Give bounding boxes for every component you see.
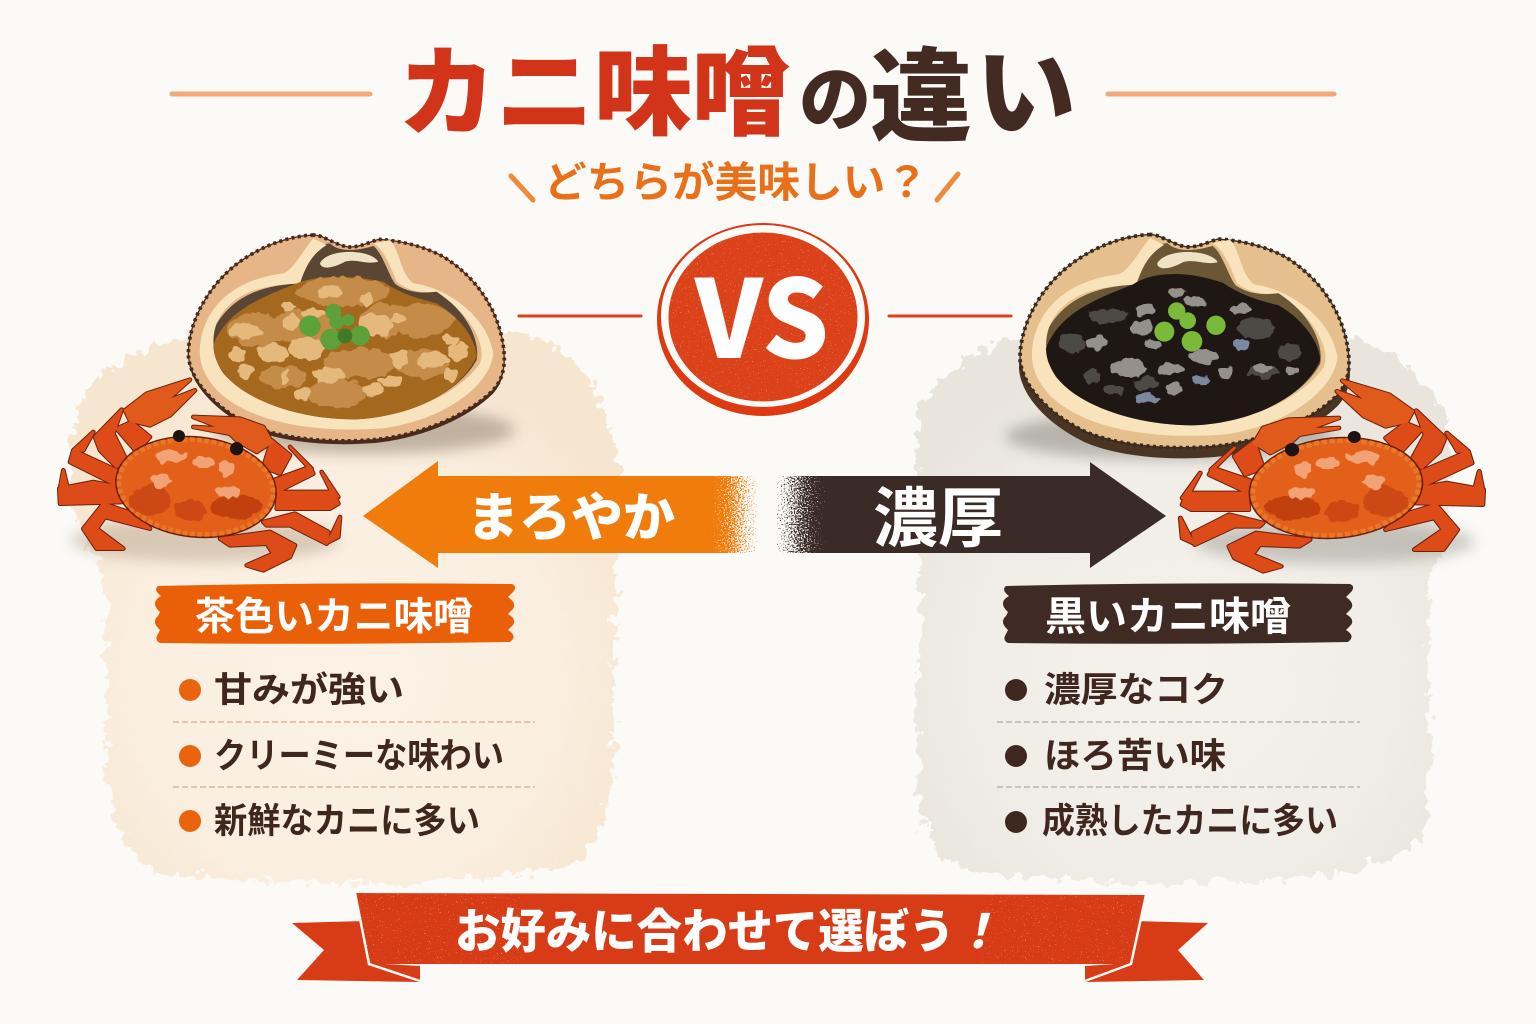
label banner: black miso	[1003, 583, 1353, 644]
panel: black crab miso background	[916, 328, 1452, 883]
label banner: brown miso	[155, 583, 515, 644]
title: の	[799, 61, 871, 141]
brown crab miso in shell	[188, 235, 515, 454]
label: rich: 濃厚	[873, 482, 1003, 555]
label banner: black miso: 黒いカニ味噌	[1045, 595, 1291, 639]
bottom ribbon	[292, 893, 1208, 982]
VS badge	[657, 223, 869, 416]
label banner: brown miso: 茶色いカニ味噌	[195, 596, 473, 639]
bottom ribbon: お好みに合わせて選ぼう！	[455, 905, 1000, 958]
list: brown miso traits: 新鮮なカニに多い	[214, 802, 480, 841]
subtitle: どちらが美味しい？	[544, 159, 928, 206]
panel: brown crab miso background	[71, 327, 618, 884]
VS connector lines	[519, 314, 1011, 318]
crab: left	[59, 380, 340, 570]
crab: right	[1180, 381, 1484, 571]
VS badge: VS	[694, 234, 829, 390]
title: い	[976, 38, 1076, 150]
black crab miso in shell	[1005, 235, 1349, 460]
list: black miso traits: 濃厚なコク	[1044, 671, 1228, 710]
list: black miso traits	[997, 671, 1360, 841]
arrow: rich (dark)	[777, 462, 1166, 568]
list: brown miso traits: クリーミーな味わい	[214, 737, 504, 776]
title: カニ味噌	[398, 38, 790, 148]
title decoration lines	[172, 92, 1334, 96]
list: brown miso traits	[173, 671, 535, 841]
list: brown miso traits: 甘みが強い	[214, 671, 404, 710]
list: black miso traits: 成熟したカニに多い	[1042, 802, 1338, 841]
arrow: mellow (orange)	[363, 461, 757, 568]
list: black miso traits: ほろ苦い味	[1044, 737, 1226, 776]
label: mellow: まろやか	[467, 490, 675, 548]
title: 違	[870, 41, 972, 155]
